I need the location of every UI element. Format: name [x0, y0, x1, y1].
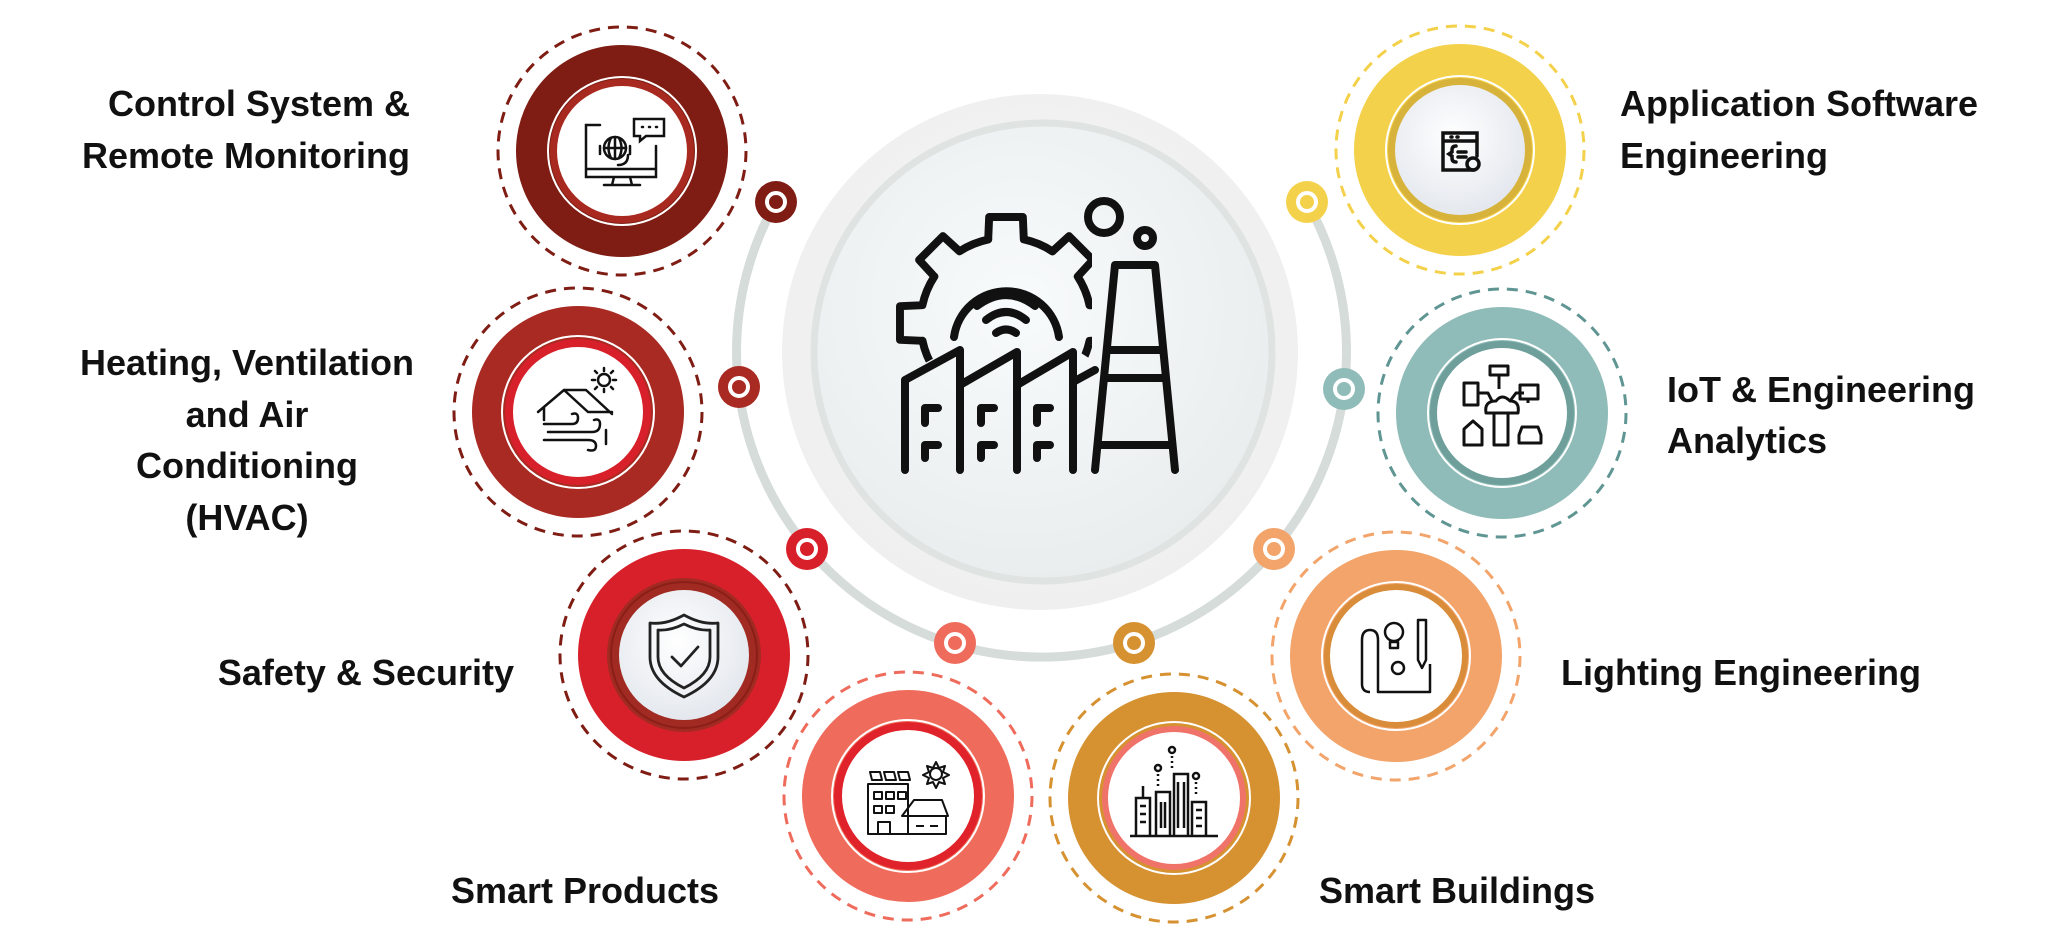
connector arc — [736, 202, 1346, 657]
node: application software — [1336, 26, 1584, 274]
label: application software: Application Software — [1620, 83, 1978, 124]
icon: monitor support — [586, 119, 664, 185]
node: safety — [560, 531, 808, 779]
label: application software: Engineering — [1620, 135, 1828, 176]
label: hvac: (HVAC) — [185, 497, 309, 538]
node: smart products — [784, 672, 1032, 920]
dots on arc — [718, 181, 1365, 664]
node: lighting — [1272, 532, 1520, 780]
icon: blueprint bulb pencil — [1362, 620, 1430, 692]
node: control system — [498, 27, 746, 275]
icon: house with airflow — [538, 368, 616, 450]
node: smart buildings — [1050, 674, 1298, 922]
label: hvac: Conditioning — [136, 445, 358, 486]
label: control system: Control System & — [108, 83, 410, 124]
central hub — [782, 94, 1298, 610]
icon: shield check — [650, 615, 718, 697]
label: hvac: and Air — [186, 394, 308, 435]
label: remote monitoring: Remote Monitoring — [82, 135, 410, 176]
label: hvac: Heating, Ventilation — [80, 342, 414, 383]
label: iot: IoT & Engineering — [1667, 369, 1975, 410]
label: lighting: Lighting Engineering — [1561, 652, 1921, 693]
label: smart products: Smart Products — [451, 870, 719, 911]
icon: solar buildings — [868, 762, 949, 834]
node: iot — [1378, 289, 1626, 537]
node: hvac — [454, 288, 702, 536]
icon: code window gear — [1443, 133, 1479, 170]
icon: city skyline — [1130, 747, 1218, 836]
icon: smart factory — [898, 201, 1175, 470]
label: safety: Safety & Security — [218, 652, 514, 693]
label: smart buildings: Smart Buildings — [1319, 870, 1595, 911]
icon: iot cloud — [1464, 366, 1541, 445]
label: iot: Analytics — [1667, 420, 1827, 461]
